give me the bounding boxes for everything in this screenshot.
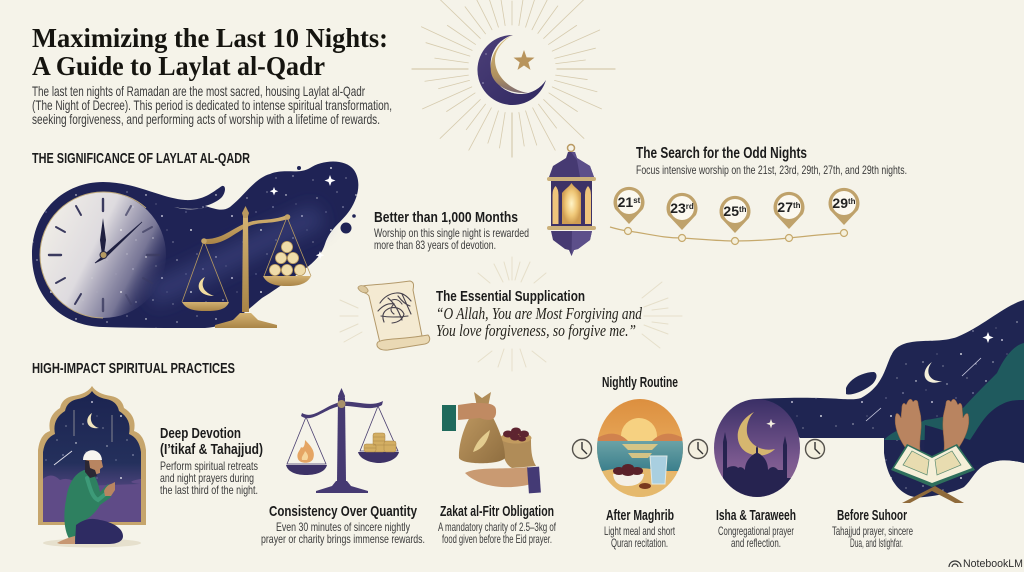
text: consistency over quantity: Even 30 minutes of sincere nightly [276,520,410,534]
text: essential supplication [436,288,643,340]
pin: 25th [719,196,750,244]
illustration: purple scale with flame and coins [286,388,399,493]
text: deep devotion: the last third of the night. [160,483,258,497]
pin: 27th: 27 [777,199,793,215]
title [32,23,388,81]
text: essential supplication: “O Allah, You are Most Forgiving and [436,304,643,323]
pin: 25th: th [739,205,747,214]
text: deep devotion: Deep Devotion [160,425,241,442]
text: after maghrib: Light meal and short [604,524,675,538]
title: A Guide to Laylat al-Qadr [32,51,325,81]
pin: 21st: 21 [618,194,633,210]
clock face [40,192,166,318]
text: after maghrib [604,507,675,550]
text: essential supplication: The Essential Supplication [436,288,585,305]
text: better than 1,000 months: Better than 1,000 Months [374,209,518,226]
pin: 23rd: rd [686,202,694,211]
text: before suhoor: Tahajjud prayer, sincere [832,524,913,538]
text: zakat al-fitr: Zakat al-Fitr Obligation [440,503,554,520]
text: before suhoor [832,507,913,550]
pin: 21st [614,187,644,234]
pin: 29th: 29 [832,195,848,211]
icon: scroll with calligraphy [358,281,430,350]
intro text: seeking forgiveness, and performing acts of worship with a lifetime of rewards. [32,111,380,127]
text: search for the odd nights [636,145,907,177]
pin: 23rd [666,193,697,242]
text: search for the odd nights: Focus intensive worship on the 21st, 23rd, 29th, 27th, and 29th nights. [636,163,907,177]
text: after maghrib: Quran recitation. [611,536,668,550]
text: before suhoor: Before Suhoor [837,507,907,524]
text: isha and taraweeh: Isha & Taraweeh [716,507,796,524]
text: better than 1,000 months: Worship on this single night is rewarded [374,226,529,240]
clock icons [572,440,824,458]
illustration: zakat grain sack and dates [442,392,541,493]
illustration: clock melting into night sky with scales [32,162,358,328]
text: better than 1,000 months: more than 83 years of devotion. [374,238,496,252]
text: search for the odd nights: The Search for the Odd Nights [636,145,807,162]
pin: 21st: st [633,196,641,205]
text: zakat al-fitr [438,503,556,546]
decorative dots [297,166,356,234]
night sky blob with hands and quran [750,295,1024,505]
watermark: NotebookLM: NotebookLM [963,558,1023,570]
heading: significance: THE SIGNIFICANCE OF LAYLAT AL-QADR [32,150,250,167]
text: zakat al-fitr: food given before the Eid prayer. [442,532,552,546]
pin: 29th: th [848,197,856,206]
pin: 25th: 25 [723,203,739,219]
circle: isha and taraweeh [714,399,800,497]
small cloud lobe [846,372,877,395]
pin: 27th: th [793,201,801,210]
text: better than 1,000 months [374,209,529,252]
intro text: (The Night of Decree). This period is dedicated to intense spiritual transformation, [32,97,392,113]
text: consistency over quantity [261,503,425,546]
text: after maghrib: After Maghrib [606,507,674,524]
intro text: The last ten nights of Ramadan are the most sacred, housing Laylat al-Qadr [32,83,365,99]
praying hands [895,399,969,450]
text: isha and taraweeh: and reflection. [731,536,781,550]
gold balance scale [182,206,311,328]
text: deep devotion: (I’tikaf & Tahajjud) [160,441,263,458]
title: Maximizing the Last 10 Nights: [32,23,388,53]
text: consistency over quantity: prayer or charity brings immense rewards. [261,532,425,546]
intro text [32,83,392,127]
pin: 27th [774,192,805,242]
text: consistency over quantity: Consistency Over Quantity [269,503,417,520]
illustration: man praying in arch [38,386,146,548]
night sky blob [32,162,358,328]
clock 2 [688,440,708,458]
text: isha and taraweeh [716,507,796,550]
text: essential supplication: You love forgiveness, so forgive me.” [436,321,636,340]
text: deep devotion: and night prayers during [160,471,254,485]
text: deep devotion [160,425,263,497]
heading: nightly routine: Nightly Routine [602,374,678,391]
pin: 29th [828,188,860,236]
text: before suhoor: Dua, and Istighfar. [850,536,903,550]
circle: after maghrib [597,399,683,497]
clock 3 [806,440,824,458]
icon: crescent moon and star with rays [412,0,615,157]
text: deep devotion: Perform spiritual retreats [160,459,258,473]
pin: 23rd: 23 [670,200,686,216]
sky [750,295,1024,505]
book on stand [891,444,975,503]
heading: practices: HIGH-IMPACT SPIRITUAL PRACTICES [32,360,235,377]
text: isha and taraweeh: Congregational prayer [718,524,794,538]
text: zakat al-fitr: A mandatory charity of 2.5–3kg of [438,520,556,534]
rays around supplication [340,257,682,371]
timeline: odd nights [610,187,860,244]
icon: lantern [547,144,596,256]
clock 1 [572,440,592,458]
